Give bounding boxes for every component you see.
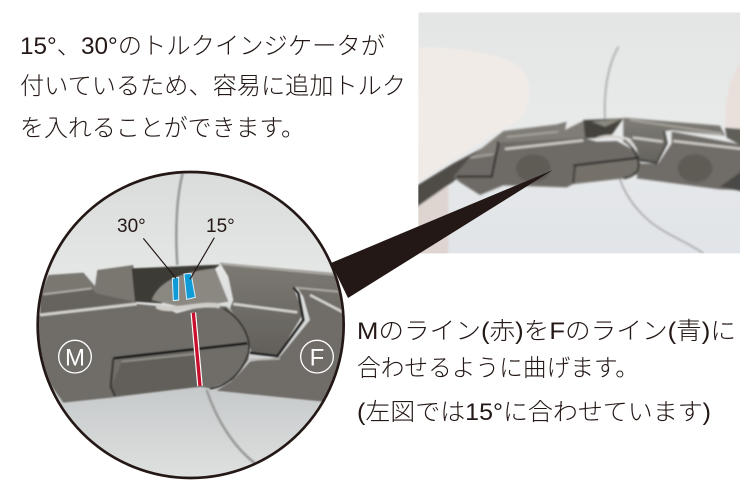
- glove finger, right: [725, 60, 743, 130]
- rivets: [516, 154, 551, 182]
- text block: alignment instruction: 合わせるように曲げます。: [357, 355, 639, 382]
- indicator dome: [152, 268, 228, 307]
- blue 15 degree mark: [184, 273, 195, 299]
- callout pointer wedge: [331, 170, 553, 298]
- M marker: M: [65, 345, 85, 372]
- back piece of the M side: [468, 120, 585, 159]
- right plate: [623, 118, 725, 162]
- text block: torque indicator description: 付いているため、容易に追加トルク: [20, 73, 406, 100]
- M body: [33, 304, 250, 403]
- lower right tip: [720, 172, 740, 192]
- magnified circle view: [33, 170, 350, 480]
- highlights: [40, 295, 344, 315]
- spring slot: [457, 142, 498, 177]
- leader lines: [143, 238, 214, 279]
- lower M jaw: [112, 353, 202, 396]
- label: 15 degrees: 15°: [206, 216, 235, 237]
- M back section: [40, 265, 137, 315]
- M marker: [59, 340, 91, 373]
- text block: alignment instruction: (左図では15°に合わせています): [357, 399, 711, 426]
- blue 30 degree mark: [172, 277, 179, 301]
- text block: alignment instruction: [357, 318, 736, 426]
- text block: torque indicator description: 15°、30°のトルクインジケータが: [20, 33, 385, 60]
- highlights: [505, 138, 743, 149]
- handle strip: [418, 148, 482, 208]
- text block: torque indicator description: [20, 33, 406, 142]
- lens outline: [38, 172, 344, 478]
- main M body: [453, 138, 640, 195]
- window: [132, 265, 220, 303]
- joint lines: [113, 343, 247, 358]
- wire: [605, 47, 703, 253]
- text block: alignment instruction: Mのライン(赤)をFのライン(青)に: [357, 318, 736, 345]
- F body: [217, 287, 348, 402]
- text block: torque indicator description: を入れることができます。: [20, 115, 305, 142]
- photo: pliers held in gloved fingers: [415, 12, 743, 257]
- F marker: [301, 340, 333, 373]
- glove finger, left: [415, 48, 529, 185]
- wire: [176, 173, 255, 463]
- right plate: [220, 263, 345, 355]
- F marker: F: [310, 345, 324, 372]
- red M line: [193, 313, 200, 386]
- raised lip: [157, 305, 220, 309]
- label: 30 degrees: 30°: [117, 216, 146, 237]
- F body: [637, 132, 743, 190]
- window: [583, 118, 623, 138]
- hinge and jaw: [573, 158, 640, 184]
